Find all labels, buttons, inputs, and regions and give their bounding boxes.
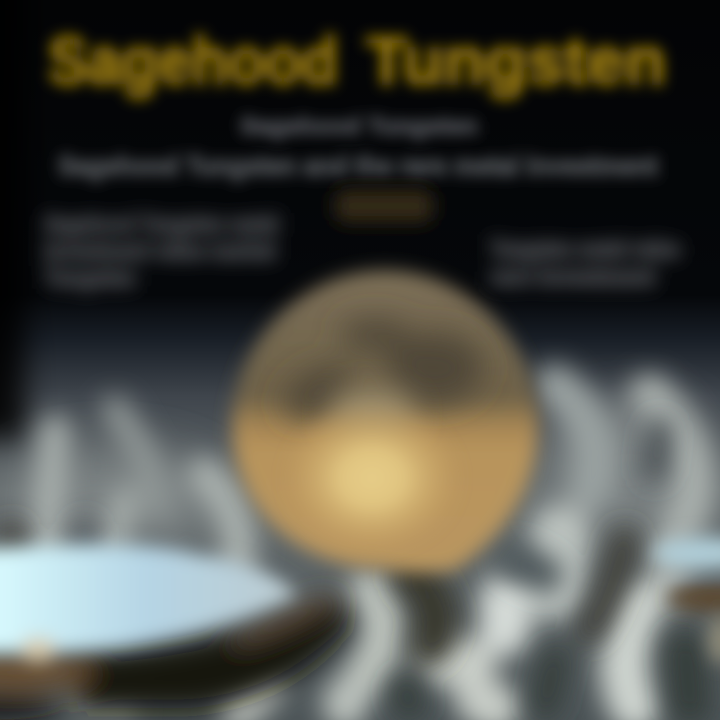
left text block bbox=[44, 211, 279, 292]
coin glow bbox=[280, 400, 464, 556]
dark engraving on coin bbox=[275, 319, 483, 428]
right text block: rare investment bbox=[490, 264, 655, 291]
tagline: Sagehood Tungsten and the rare metal investment bbox=[58, 150, 658, 181]
brown rim at lower left bbox=[0, 588, 350, 720]
left text block: investment value market bbox=[44, 238, 276, 265]
title: Tungsten bbox=[366, 23, 666, 99]
grey haze behind ridges bbox=[0, 400, 715, 550]
title bbox=[48, 23, 666, 99]
left text block: Tungsten bbox=[44, 265, 136, 292]
subtitle: Sagehood Tungsten bbox=[240, 113, 478, 140]
dark shadows between ridges bbox=[12, 430, 690, 705]
silver wavy ridges bbox=[45, 385, 692, 708]
gold coin sphere bbox=[232, 270, 538, 572]
title: Sagehood bbox=[48, 23, 338, 99]
right text block bbox=[490, 236, 680, 291]
small gold label bbox=[335, 190, 433, 222]
left text block: Sagehood Tungsten metal bbox=[44, 211, 279, 238]
pale blue disc, right edge bbox=[653, 537, 720, 664]
pale blue disc, left bbox=[0, 544, 298, 662]
